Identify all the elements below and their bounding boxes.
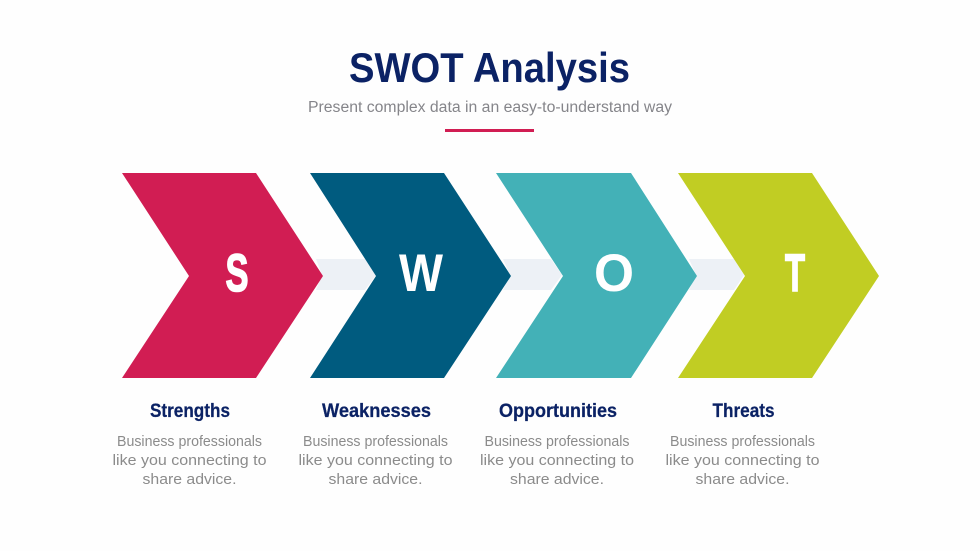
text block: threats: [666, 401, 820, 488]
text block: strengths: [112, 401, 266, 488]
text block: opportunities: like you connecting to: [480, 452, 634, 469]
text block: strengths: share advice.: [142, 471, 236, 488]
text block: strengths: Strengths: [150, 401, 230, 422]
text block: opportunities: [480, 401, 634, 488]
text block: threats: like you connecting to: [666, 452, 820, 469]
chevron: W weaknesses: W: [399, 244, 443, 303]
text block: weaknesses: Business professionals: [303, 433, 448, 450]
text block: strengths: Business professionals: [117, 433, 262, 450]
chevron: W weaknesses: [310, 173, 511, 378]
text block: threats: share advice.: [696, 471, 790, 488]
text block: opportunities: Opportunities: [499, 401, 617, 422]
text block: opportunities: Business professionals: [484, 433, 630, 450]
chevron: O opportunities: [496, 173, 697, 378]
chevron: O opportunities: O: [594, 244, 634, 303]
text block: weaknesses: like you connecting to: [298, 452, 452, 469]
text block: strengths: like you connecting to: [112, 452, 266, 469]
text block: weaknesses: Weaknesses: [322, 401, 431, 422]
text block: weaknesses: share advice.: [328, 471, 422, 488]
connector band: weaknesses to opportunities: [503, 259, 562, 290]
chevron: T threats: [678, 173, 879, 378]
text block: weaknesses: [298, 401, 452, 488]
title: SWOT Analysis: [349, 44, 630, 91]
chevron: S strengths: [122, 173, 323, 378]
text block: threats: Threats: [712, 401, 774, 422]
text block: threats: Business professionals: [670, 433, 815, 450]
subtitle: Present complex data in an easy-to-understand way: [308, 99, 672, 116]
connector band: opportunities to threats: [689, 259, 744, 290]
chevron: T threats: T: [785, 244, 805, 303]
accent underline: [445, 129, 534, 132]
connector band: strengths to weaknesses: [316, 259, 376, 290]
chevron: S strengths: S: [226, 244, 248, 303]
text block: opportunities: share advice.: [510, 471, 604, 488]
